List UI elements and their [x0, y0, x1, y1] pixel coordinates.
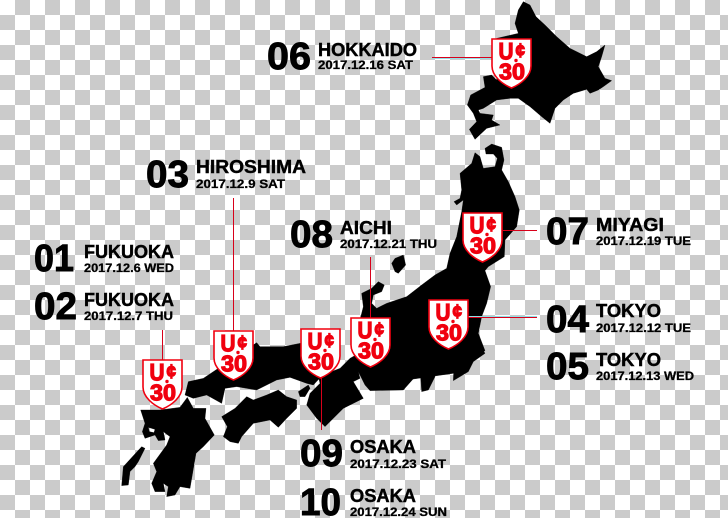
badge: Hokkaido: ¢: [516, 41, 525, 62]
badge: Miyagi: ¢: [486, 215, 496, 236]
badge: Aichi: ¢: [374, 320, 384, 341]
label 10 Osaka: OSAKA: [350, 485, 416, 506]
label 06 Hokkaido: [267, 36, 417, 78]
island: western Honshu: [185, 340, 337, 403]
label 04 Tokyo: TOKYO: [596, 300, 661, 321]
label 07 Miyagi: [546, 211, 691, 253]
label 09 Osaka: [300, 433, 447, 475]
label 01 Fukuoka: 01: [34, 238, 74, 280]
badge: Hiroshima: 30: [221, 350, 247, 376]
label 01 Fukuoka: 2017.12.6 WED: [84, 261, 174, 275]
badge: Tokyo: 30: [436, 320, 462, 346]
label 08 Aichi: [290, 214, 437, 256]
label 02 Fukuoka: 02: [34, 286, 77, 328]
label 07 Miyagi: 2017.12.19 TUE: [596, 234, 691, 248]
badge: Hiroshima: ¢: [238, 333, 247, 354]
label 04 Tokyo: 2017.12.12 TUE: [596, 321, 691, 335]
label 03 Hiroshima: 2017.12.9 SAT: [196, 177, 286, 191]
label 03 Hiroshima: [146, 154, 306, 196]
badge: Miyagi: U: [470, 212, 484, 240]
badge: Aichi: 30: [358, 338, 384, 364]
badge: Aichi: [351, 318, 390, 367]
label 02 Fukuoka: 2017.12.7 THU: [84, 309, 173, 323]
label 01 Fukuoka: FUKUOKA: [84, 241, 174, 262]
label 05 Tokyo: TOKYO: [596, 349, 661, 370]
badge: Fukuoka: [143, 360, 182, 409]
badge: Osaka: ¢: [324, 331, 334, 352]
label 07 Miyagi: 07: [546, 211, 589, 253]
label 04 Tokyo: 04: [546, 299, 589, 341]
map of Japan: [122, 2, 612, 497]
island: Sado: [392, 255, 406, 273]
label 06 Hokkaido: HOKKAIDO: [318, 39, 417, 60]
badge: Fukuoka: ¢: [166, 362, 176, 383]
label 04 Tokyo: [546, 299, 691, 341]
badge: Osaka: U: [308, 328, 322, 356]
island: Shikoku: [222, 390, 297, 443]
label 07 Miyagi: MIYAGI: [596, 214, 664, 235]
island: Goto: [122, 447, 145, 486]
badge: Hiroshima: U: [220, 330, 236, 358]
badge: Hokkaido: U: [498, 38, 514, 66]
label 09 Osaka: OSAKA: [350, 436, 416, 457]
label 08 Aichi: 08: [290, 214, 333, 256]
label 08 Aichi: AICHI: [340, 217, 392, 238]
connector lines: [162, 58, 537, 430]
label 08 Aichi: 2017.12.21 THU: [340, 237, 437, 251]
badge: Miyagi: [463, 212, 502, 262]
island: Kyushu: [141, 397, 214, 497]
badge: Tokyo: U: [436, 300, 450, 326]
label 03 Hiroshima: 03: [146, 154, 189, 196]
label 03 Hiroshima: HIROSHIMA: [196, 156, 306, 177]
label 02 Fukuoka: FUKUOKA: [84, 289, 174, 310]
island: northern and central Honshu: [360, 144, 519, 380]
badge: Tokyo: ¢: [452, 302, 462, 323]
label 09 Osaka: 2017.12.23 SAT: [350, 457, 447, 471]
badge: Miyagi: 30: [470, 232, 496, 258]
label 02 Fukuoka: [34, 286, 174, 328]
label 05 Tokyo: 05: [546, 346, 589, 388]
badge: Hokkaido: [492, 38, 531, 88]
badge: Fukuoka: 30: [150, 380, 176, 406]
island: Hokkaido: [467, 2, 612, 139]
island: Awaji: [298, 385, 310, 397]
badge: Osaka: 30: [308, 348, 334, 374]
label 01 Fukuoka: [34, 238, 174, 280]
badge: Hiroshima: [214, 330, 253, 380]
badge: Fukuoka: U: [150, 360, 164, 386]
badge: Tokyo: [429, 300, 468, 349]
badge: Aichi: U: [358, 318, 372, 344]
island: Kanto and Kansai coast: [307, 330, 485, 427]
label 05 Tokyo: 2017.12.13 WED: [596, 369, 694, 383]
label 09 Osaka: 09: [300, 433, 343, 475]
label 10 Osaka: [300, 482, 447, 518]
badge: Osaka: [301, 328, 340, 378]
label 06 Hokkaido: 2017.12.16 SAT: [318, 58, 414, 72]
label 06 Hokkaido: 06: [267, 36, 311, 78]
badge: Hokkaido: 30: [499, 58, 525, 84]
label 05 Tokyo: [546, 346, 694, 388]
